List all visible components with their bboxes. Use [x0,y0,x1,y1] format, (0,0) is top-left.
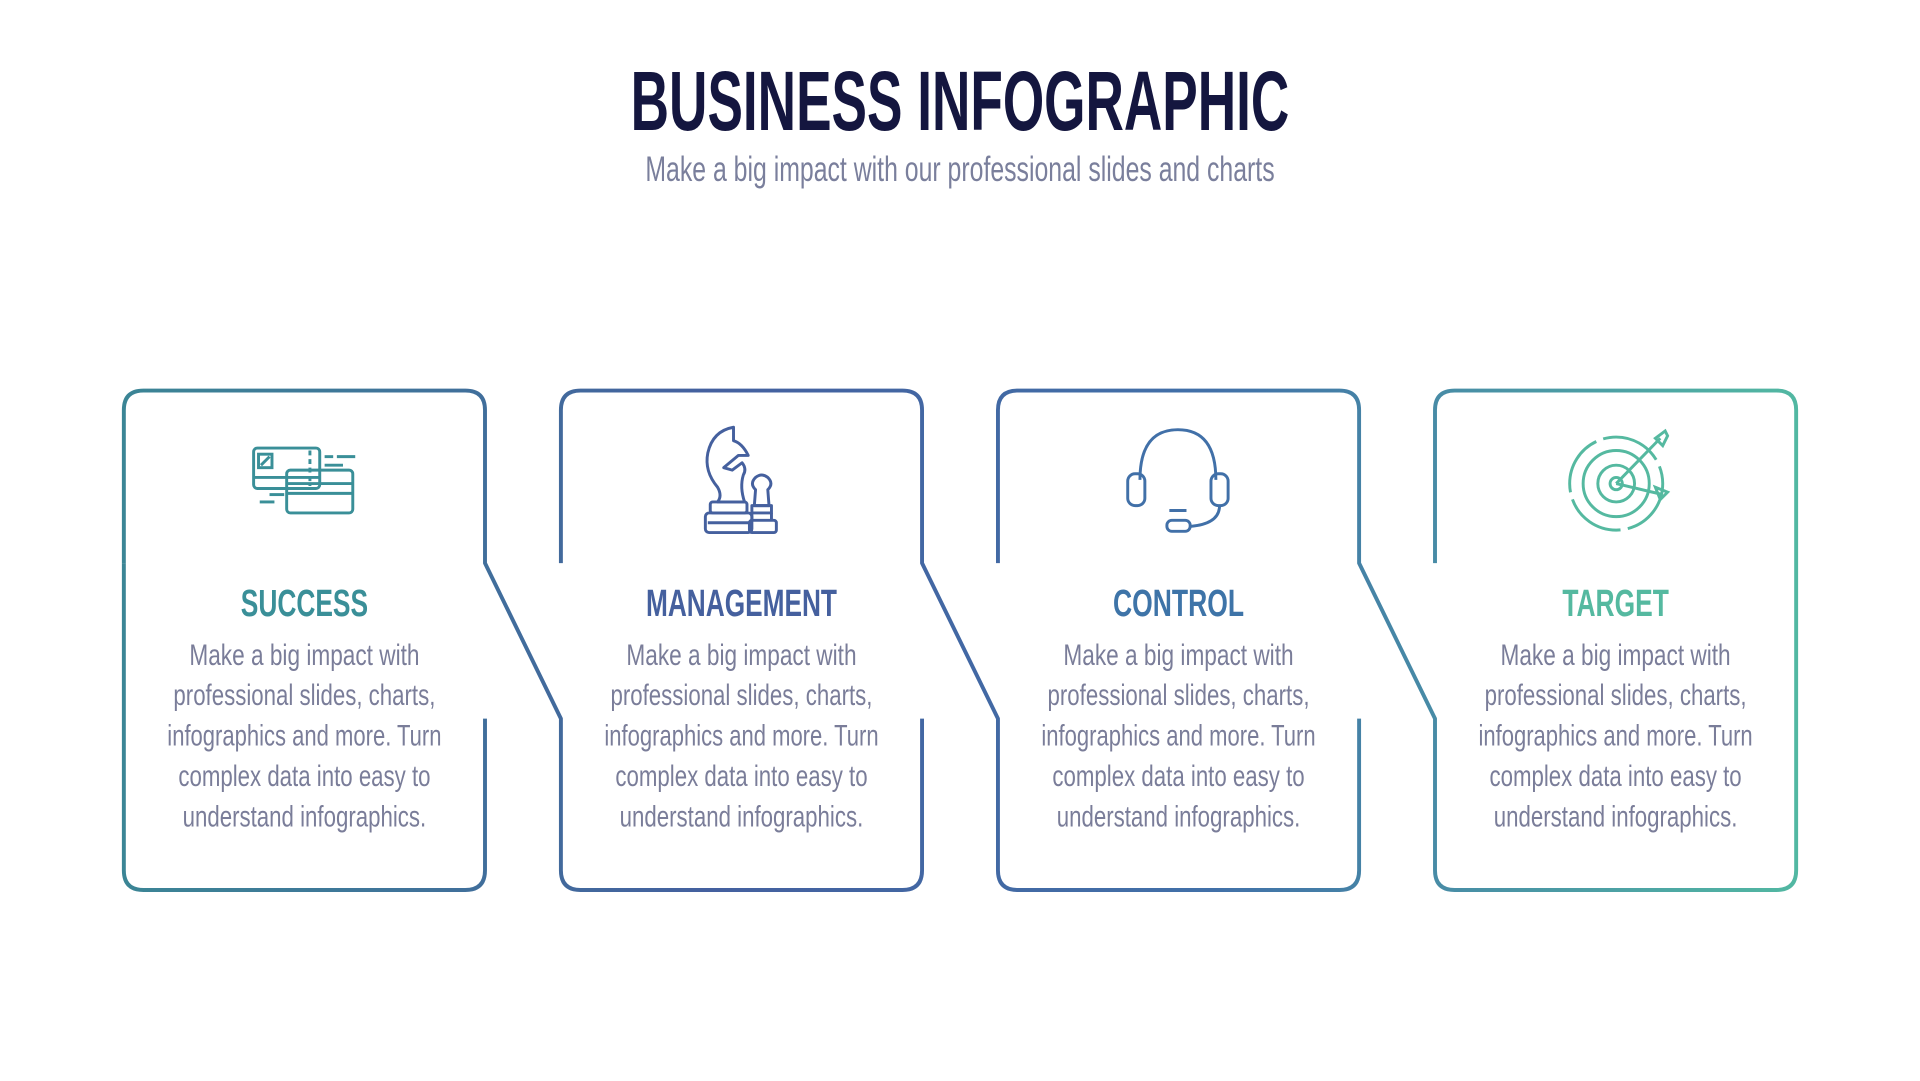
panel: success [167,448,442,833]
heading: control: CONTROL [1113,583,1244,625]
text: target body: infographics and more. Turn [1478,720,1753,753]
text: success body: infographics and more. Turn [167,720,442,753]
title: BUSINESS INFOGRAPHIC [631,54,1289,148]
panel: control [1041,430,1316,833]
subtitle: Make a big impact with our professional slides and charts [645,149,1275,189]
text: target body: complex data into easy to [1489,760,1742,793]
icon: chess pieces [705,427,776,533]
text: target body: professional slides, charts, [1485,679,1747,712]
heading: target: TARGET [1562,583,1669,625]
text: control body: infographics and more. Turn [1041,720,1316,753]
text: management body: complex data into easy to [615,760,868,793]
text: control body: complex data into easy to [1052,760,1305,793]
text: success body: professional slides, charts, [173,679,435,712]
text: target body [1478,639,1753,833]
text: management body: infographics and more. Turn [604,720,879,753]
text: control body [1041,639,1316,833]
text: target body: Make a big impact with [1500,639,1731,672]
text: success body [167,639,442,833]
text: management body: understand infographics. [620,800,863,833]
text: control body: Make a big impact with [1063,639,1294,672]
text: target body: understand infographics. [1494,800,1737,833]
icon: target with arrow [1570,431,1668,530]
panel: target [1478,431,1753,833]
panel: management [604,427,879,833]
text: success body: Make a big impact with [189,639,420,672]
text: control body: professional slides, charts, [1048,679,1310,712]
icon: credit cards [254,448,355,513]
heading: success: SUCCESS [241,583,368,625]
heading: management: MANAGEMENT [646,583,837,625]
icon: headset [1128,430,1228,531]
text: management body [604,639,879,833]
text: success body: understand infographics. [183,800,426,833]
text: control body: understand infographics. [1057,800,1300,833]
card outlines [124,391,1796,890]
text: success body: complex data into easy to [178,760,431,793]
text: management body: professional slides, charts, [610,679,872,712]
text: management body: Make a big impact with [626,639,857,672]
